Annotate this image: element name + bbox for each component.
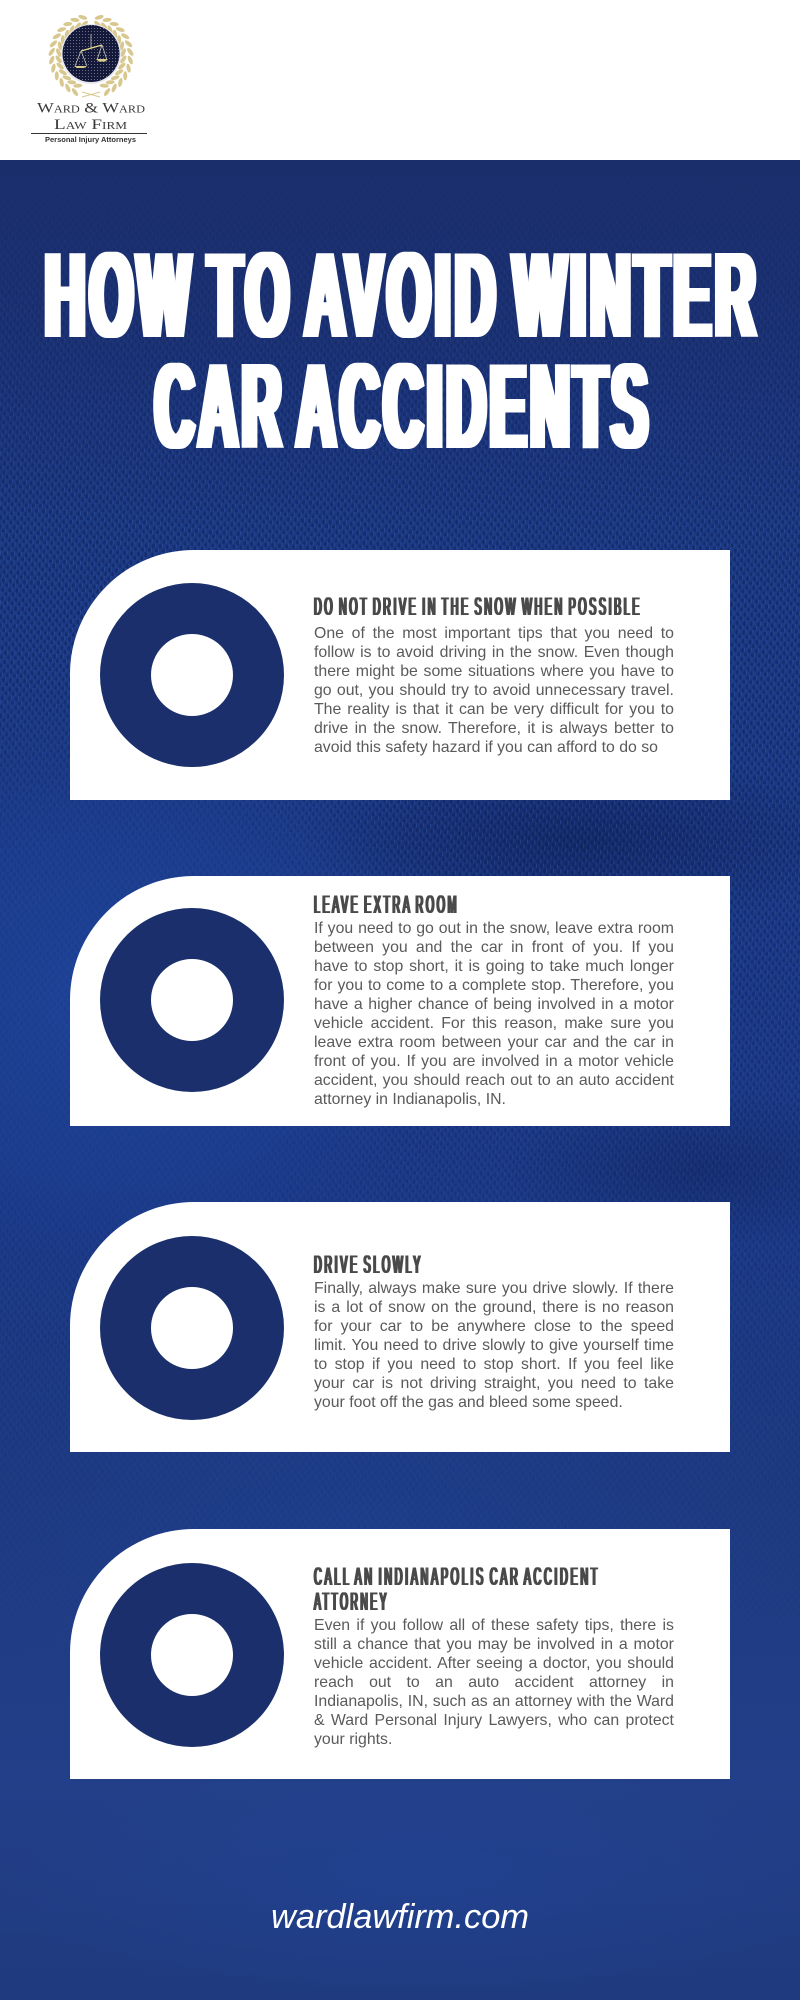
body text: for you to come to a complete stop. Therefore, you [314, 977, 673, 994]
body text: vehicle accident. For this reason, make sure you [314, 1015, 673, 1032]
logo wreath [47, 12, 135, 98]
body text: One of the most important tips that you need to [314, 625, 673, 642]
body text: The reality is that it can be very difficult for you to [314, 701, 673, 718]
title [44, 227, 760, 474]
heading: ATTORNEY [314, 1588, 389, 1616]
body text: Indianapolis, IN, such as an attorney with the Ward [314, 1693, 673, 1710]
body text: If you need to go out in the snow, leave extra room [314, 920, 673, 937]
panel: do not drive in the snow [70, 550, 730, 800]
body text: Even if you follow all of these safety tips, there is [314, 1617, 673, 1634]
body text: go out, you should try to avoid unnecessary travel. [314, 682, 673, 699]
heading [313, 1563, 600, 1616]
body text: your rights. [314, 1731, 392, 1748]
panel: drive slowly [70, 1202, 730, 1452]
firm name: Ward & Ward [37, 100, 145, 116]
heading: LEAVE EXTRA ROOM [314, 891, 459, 919]
number ring [100, 1563, 284, 1747]
panel: leave extra room [70, 876, 730, 1126]
body text [314, 1617, 674, 1748]
body text: leave extra room between your car and the car in [314, 1034, 673, 1051]
number ring [100, 1236, 284, 1420]
body text: your foot off the gas and bleed some speed. [314, 1394, 622, 1411]
heading: DRIVE SLOWLY [314, 1251, 423, 1279]
body text [314, 920, 674, 1108]
body text: to stop if you need to stop short. If you feel like [314, 1356, 673, 1373]
body text [314, 1280, 674, 1411]
body text: your car is not driving straight, you need to take [314, 1375, 673, 1392]
body text: have a higher chance of being involved in a motor [314, 996, 673, 1013]
body text: front of you. If you are involved in a motor vehicle [314, 1053, 673, 1070]
body text: reach out to an auto accident attorney in [314, 1674, 673, 1691]
body text: have to stop short, it is going to take much longer [314, 958, 673, 975]
header logo [31, 15, 147, 144]
body text [314, 625, 674, 756]
website footer: wardlawfirm.com [271, 1898, 529, 1936]
firm name [37, 100, 145, 133]
body text: accident, you should reach out to an auto accident [314, 1072, 673, 1089]
body text: avoid this safety hazard if you can afford to do so [314, 739, 657, 756]
number ring [100, 583, 284, 767]
body text: limit. You need to drive slowly to give yourself time [314, 1337, 673, 1354]
body text: drive in the snow. Therefore, it is always better to [314, 720, 673, 737]
firm name: Law Firm [54, 117, 127, 133]
body text: is a lot of snow on the ground, there is no reason [314, 1299, 673, 1316]
body text: still a chance that you may be involved in a motor [314, 1636, 673, 1653]
body text: for your car to be anywhere close to the speed [314, 1318, 673, 1335]
body text: between you and the car in front of you. If you [314, 939, 673, 956]
body text: & Ward Personal Injury Lawyers, who can protect [314, 1712, 673, 1729]
body text: Finally, always make sure you drive slowly. If there [314, 1280, 673, 1297]
body text: attorney in Indianapolis, IN. [314, 1091, 505, 1108]
number ring [100, 908, 284, 1092]
body text: follow is to avoid driving in the snow. Even though [314, 644, 673, 661]
body text: vehicle accident. After seeing a doctor, you should [314, 1655, 673, 1672]
tagline: Personal Injury Attorneys [45, 135, 136, 144]
body text: there might be some situations where you have to [314, 663, 673, 680]
logo seal [61, 24, 121, 84]
panel: call an attorney [70, 1529, 730, 1779]
